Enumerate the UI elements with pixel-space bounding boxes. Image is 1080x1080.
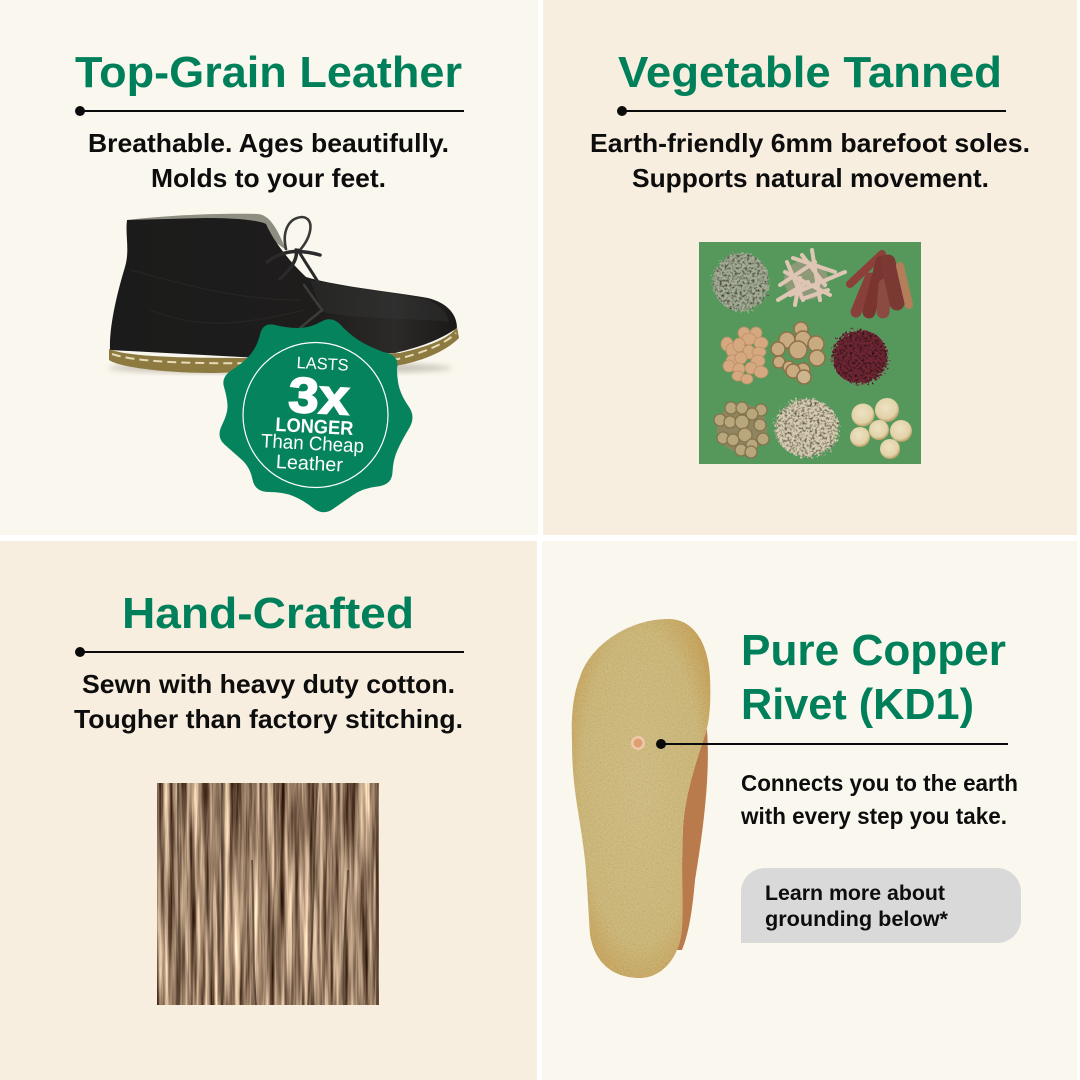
callout: learn more about grounding: Learn more about	[765, 881, 945, 905]
text: leather description: Molds to your feet.	[151, 163, 386, 193]
title: pure copper rivet: Rivet (KD1)	[741, 680, 974, 729]
pile: mixed pale roots	[775, 399, 839, 457]
pile: red bark sticks	[850, 254, 909, 312]
pile: brown cups	[714, 402, 769, 458]
pile: pale round fruits	[850, 398, 912, 459]
panel: vegetable tanned	[543, 0, 1077, 535]
title: vegetable tanned: Vegetable Tanned	[618, 48, 1002, 97]
title: hand-crafted: Hand-Crafted	[122, 589, 414, 638]
panel: top-grain leather	[0, 0, 538, 535]
panel: hand-crafted	[0, 541, 537, 1080]
image: shoe sole with copper rivet	[572, 619, 710, 978]
pile: tan nuts	[721, 327, 768, 384]
text: leather description	[88, 128, 449, 193]
pile: dark red hibiscus	[832, 330, 888, 384]
title: pure copper rivet	[741, 626, 1006, 729]
pile: green herb flakes	[713, 253, 769, 311]
copper rivet	[631, 736, 645, 750]
badge text	[259, 352, 369, 478]
panel: pure copper rivet	[542, 541, 1077, 1080]
badge text: Leather	[275, 451, 344, 477]
text: hand-crafted description: Tougher than factory stitching.	[74, 704, 463, 734]
pointer line	[617, 106, 1006, 116]
image: black leather boot	[108, 214, 459, 374]
callout: learn more about grounding	[741, 868, 1021, 943]
text: vegetable tanned description: Earth-friendly 6mm barefoot soles.	[590, 128, 1030, 158]
image: tanning herbs and plants	[699, 242, 921, 464]
text: hand-crafted description: Sewn with heavy duty cotton.	[82, 669, 455, 699]
pointer line	[75, 647, 464, 657]
pile: dried cups	[771, 322, 825, 384]
badge text: 3x	[287, 367, 351, 426]
text: rivet description: Connects you to the earth	[741, 770, 1018, 796]
title: top-grain leather: Top-Grain Leather	[75, 48, 462, 97]
title: pure copper rivet: Pure Copper	[741, 626, 1006, 675]
text: vegetable tanned description: Supports natural movement.	[632, 163, 989, 193]
text: rivet description: with every step you take.	[740, 803, 1007, 829]
image: cotton thread strands	[157, 783, 379, 1005]
badge text: LASTS	[296, 354, 349, 375]
text: hand-crafted description	[74, 669, 463, 734]
badge text: Than Cheap	[260, 430, 365, 458]
badge: lasts 3x longer	[220, 319, 412, 512]
text: vegetable tanned description	[590, 128, 1030, 193]
callout: learn more about grounding: grounding below*	[765, 907, 949, 931]
pointer line	[656, 739, 1008, 749]
text: rivet description	[740, 770, 1018, 829]
badge text: LONGER	[275, 414, 354, 440]
pile: pale bark strips	[778, 250, 845, 305]
pointer line	[75, 106, 464, 116]
text: leather description: Breathable. Ages beautifully.	[88, 128, 449, 158]
